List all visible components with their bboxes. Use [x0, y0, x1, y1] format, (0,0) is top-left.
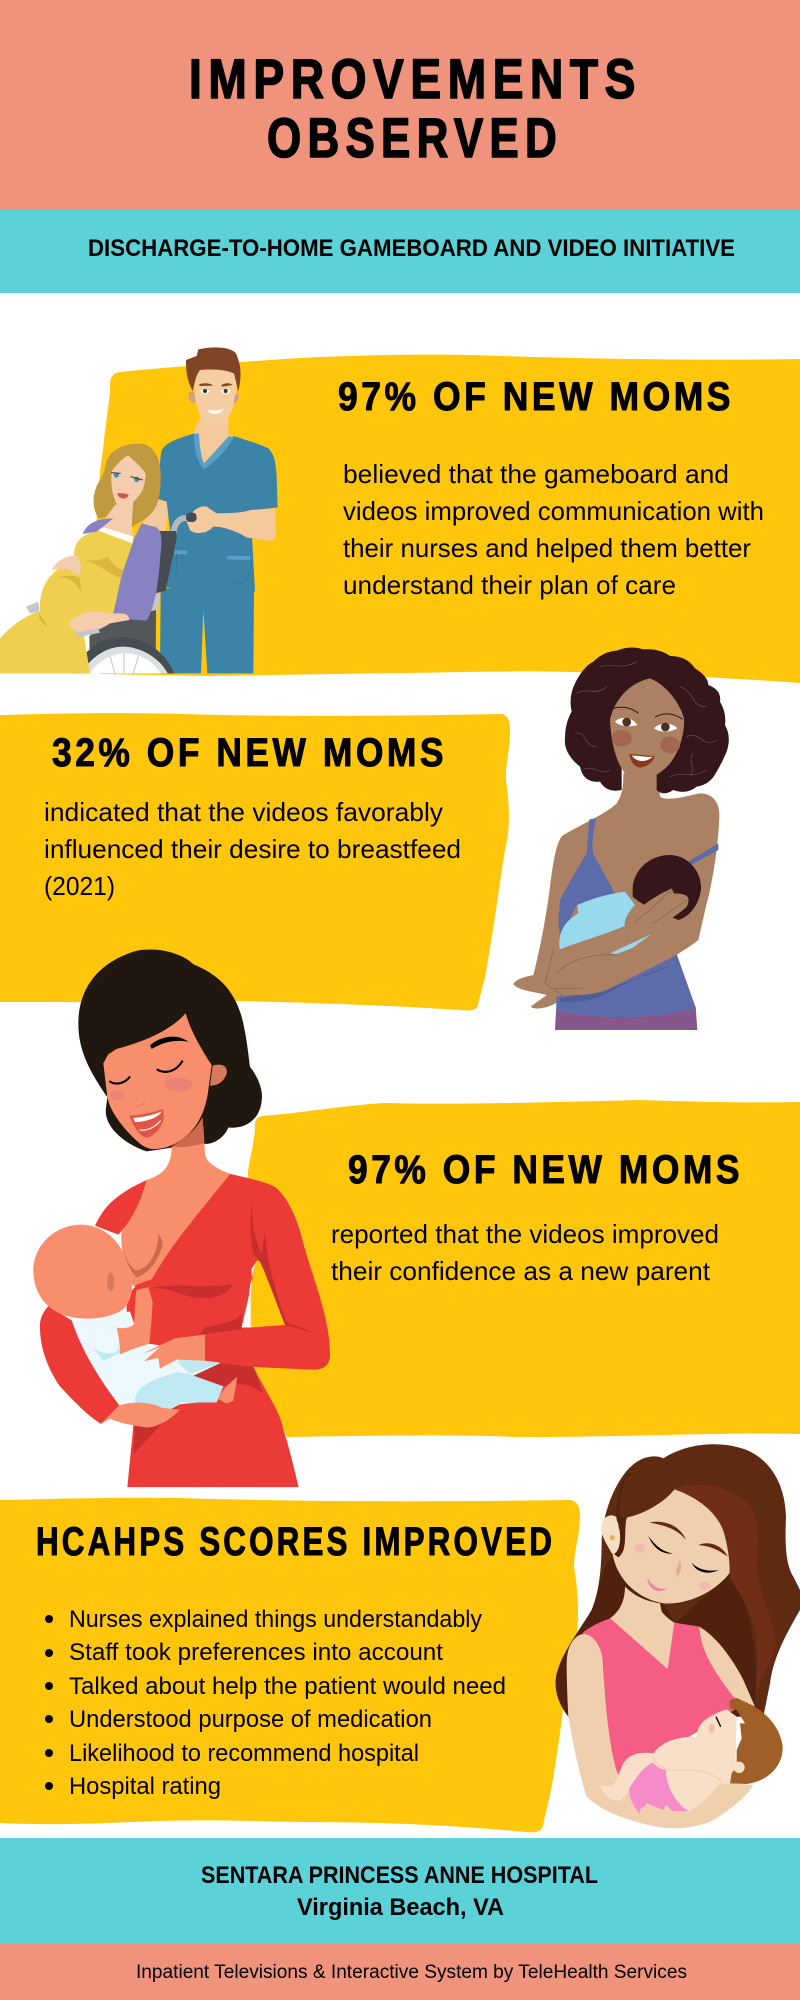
baby body: [73, 1311, 223, 1415]
breast shading: [122, 1231, 163, 1277]
facial features: [109, 1037, 192, 1138]
baby leg: [601, 1753, 653, 1801]
side lock: [614, 1467, 630, 1557]
blue strap: [688, 843, 718, 865]
mother's upper hand: [143, 1335, 205, 1369]
wheel: [73, 637, 174, 673]
dress neckline: [97, 527, 133, 543]
heading: 97% OF NEW MOMS: [348, 1148, 743, 1192]
dress shoulder: [95, 1180, 147, 1235]
baby body: [630, 1709, 737, 1812]
cheeks: [612, 730, 632, 747]
nurse ears: [189, 392, 239, 403]
purple skirt: [555, 1007, 697, 1030]
baby foot: [218, 1376, 237, 1404]
baby hair: [633, 855, 701, 920]
nurse head: [194, 370, 236, 424]
nurse scrub top: [157, 433, 278, 593]
wheelchair back and seat: [155, 531, 177, 593]
diaper: [629, 1763, 688, 1813]
baby trousers: [92, 1344, 223, 1413]
hair curls: [575, 662, 717, 777]
dress belly and drape: [0, 530, 133, 673]
credit text: Inpatient Televisions & Interactive System by TeleHealth Services: [136, 1962, 687, 1983]
lower arm and hand: [557, 923, 698, 995]
subtitle band: [0, 210, 800, 293]
hair shadow: [556, 1557, 760, 1717]
panel: 97% confidence: [247, 1100, 800, 1437]
baby arm fold: [653, 1758, 722, 1782]
arm gap white: [242, 1260, 257, 1327]
bulleted list: [45, 1606, 506, 1800]
panel: 32% breastfeed: [0, 713, 510, 1010]
face: [610, 678, 684, 781]
illustration: woman with curly hair nursing: [513, 647, 729, 1030]
ear and earring: [601, 1515, 620, 1553]
wheelchair armrest: [26, 602, 100, 637]
facial features: [634, 1522, 728, 1591]
nurse hair: [186, 347, 241, 392]
bulleted list: Likelihood to recommend hospital: [69, 1740, 419, 1767]
body text: [331, 1219, 719, 1286]
wheelchair handle: [173, 518, 190, 533]
dress: [127, 1174, 330, 1487]
illustration: woman in pink top with baby: [556, 1444, 800, 1828]
nurse left arm: [142, 500, 170, 532]
smile: [629, 754, 655, 768]
scrub collar: [194, 433, 234, 469]
cradling arm and hand: [553, 888, 689, 970]
body and arms: [513, 773, 719, 1009]
title: OBSERVED: [267, 106, 563, 169]
bulleted list: Understood purpose of medication: [69, 1706, 432, 1733]
nurse forearm and hand: [187, 506, 276, 541]
baby face: [709, 1717, 745, 1773]
woman neck: [97, 500, 133, 537]
hair front lock: [132, 471, 161, 527]
bulleted list: Talked about help the patient would need: [69, 1673, 506, 1700]
neck: [610, 1587, 675, 1669]
body text: influenced their desire to breastfeed: [44, 834, 461, 864]
nurse trousers: [160, 588, 254, 673]
illustration: woman in red dress nursing: [33, 950, 330, 1487]
eyes: [613, 707, 683, 732]
dress folds: [133, 1201, 313, 1454]
subtitle: DISCHARGE-TO-HOME GAMEBOARD AND VIDEO INITIATIVE: [88, 235, 735, 262]
blue top lower: [556, 954, 696, 1017]
woman face: [111, 455, 147, 510]
title: [189, 47, 642, 169]
cardigan: [83, 518, 161, 621]
blue top upper: [558, 818, 615, 940]
curly hair: [565, 647, 729, 793]
neck and chest: [121, 1126, 233, 1286]
nurse neck: [193, 413, 235, 470]
bulleted list: Nurses explained things understandably: [69, 1606, 482, 1633]
bulleted list: Staff took preferences into account: [69, 1639, 443, 1666]
woman hands: [52, 556, 129, 632]
scrub pockets: [175, 550, 251, 560]
nurse face details: [199, 383, 233, 414]
mother's hand: [640, 1806, 713, 1828]
body text: their confidence as a new parent: [331, 1256, 711, 1286]
body text: reported that the videos improved: [331, 1219, 719, 1249]
body text: understand their plan of care: [343, 570, 676, 600]
body text: their nurses and helped them better: [343, 533, 751, 563]
arm gap yellow: [251, 1260, 285, 1327]
heading: HCAHPS SCORES IMPROVED: [36, 1520, 555, 1564]
body text: believed that the gameboard and: [343, 459, 729, 489]
body text: indicated that the videos favorably: [44, 797, 443, 827]
baby arm: [117, 1287, 153, 1354]
body text: videos improved communication with: [343, 496, 764, 526]
body text: [44, 797, 461, 901]
baby hair: [729, 1699, 783, 1784]
heading: 97% OF NEW MOMS: [338, 375, 734, 419]
title: IMPROVEMENTS: [189, 47, 642, 110]
header band: [0, 0, 800, 210]
body text: [343, 459, 764, 600]
hospital location: Virginia Beach, VA: [297, 1894, 504, 1921]
sleeve forearm: [205, 1325, 330, 1370]
footer band: [0, 1838, 800, 1944]
mother's arms: [567, 1634, 753, 1828]
mother's lower hand: [101, 1403, 180, 1427]
pink top: [582, 1618, 740, 1777]
panel: 97% communication: [95, 355, 800, 683]
woman face details: [111, 472, 143, 499]
heading: 32% OF NEW MOMS: [52, 731, 447, 775]
hospital name: SENTARA PRINCESS ANNE HOSPITAL: [201, 1862, 598, 1889]
face: [612, 1489, 730, 1603]
credit band: [0, 1944, 800, 2000]
panel: HCAHPS: [0, 1498, 580, 1832]
body text: (2021): [44, 871, 115, 901]
baby head: [33, 1225, 132, 1319]
ear: [210, 1065, 227, 1086]
woman hair: [94, 444, 161, 527]
illustration: nurse and pregnant woman in wheelchair: [0, 347, 278, 673]
bulleted list: Hospital rating: [69, 1773, 221, 1800]
long hair: [556, 1444, 800, 1717]
hair highlight: [675, 1485, 776, 1703]
face: [103, 1013, 212, 1149]
dress sleeve: [40, 1306, 119, 1424]
hair: [78, 950, 262, 1151]
blanket: [559, 892, 652, 954]
